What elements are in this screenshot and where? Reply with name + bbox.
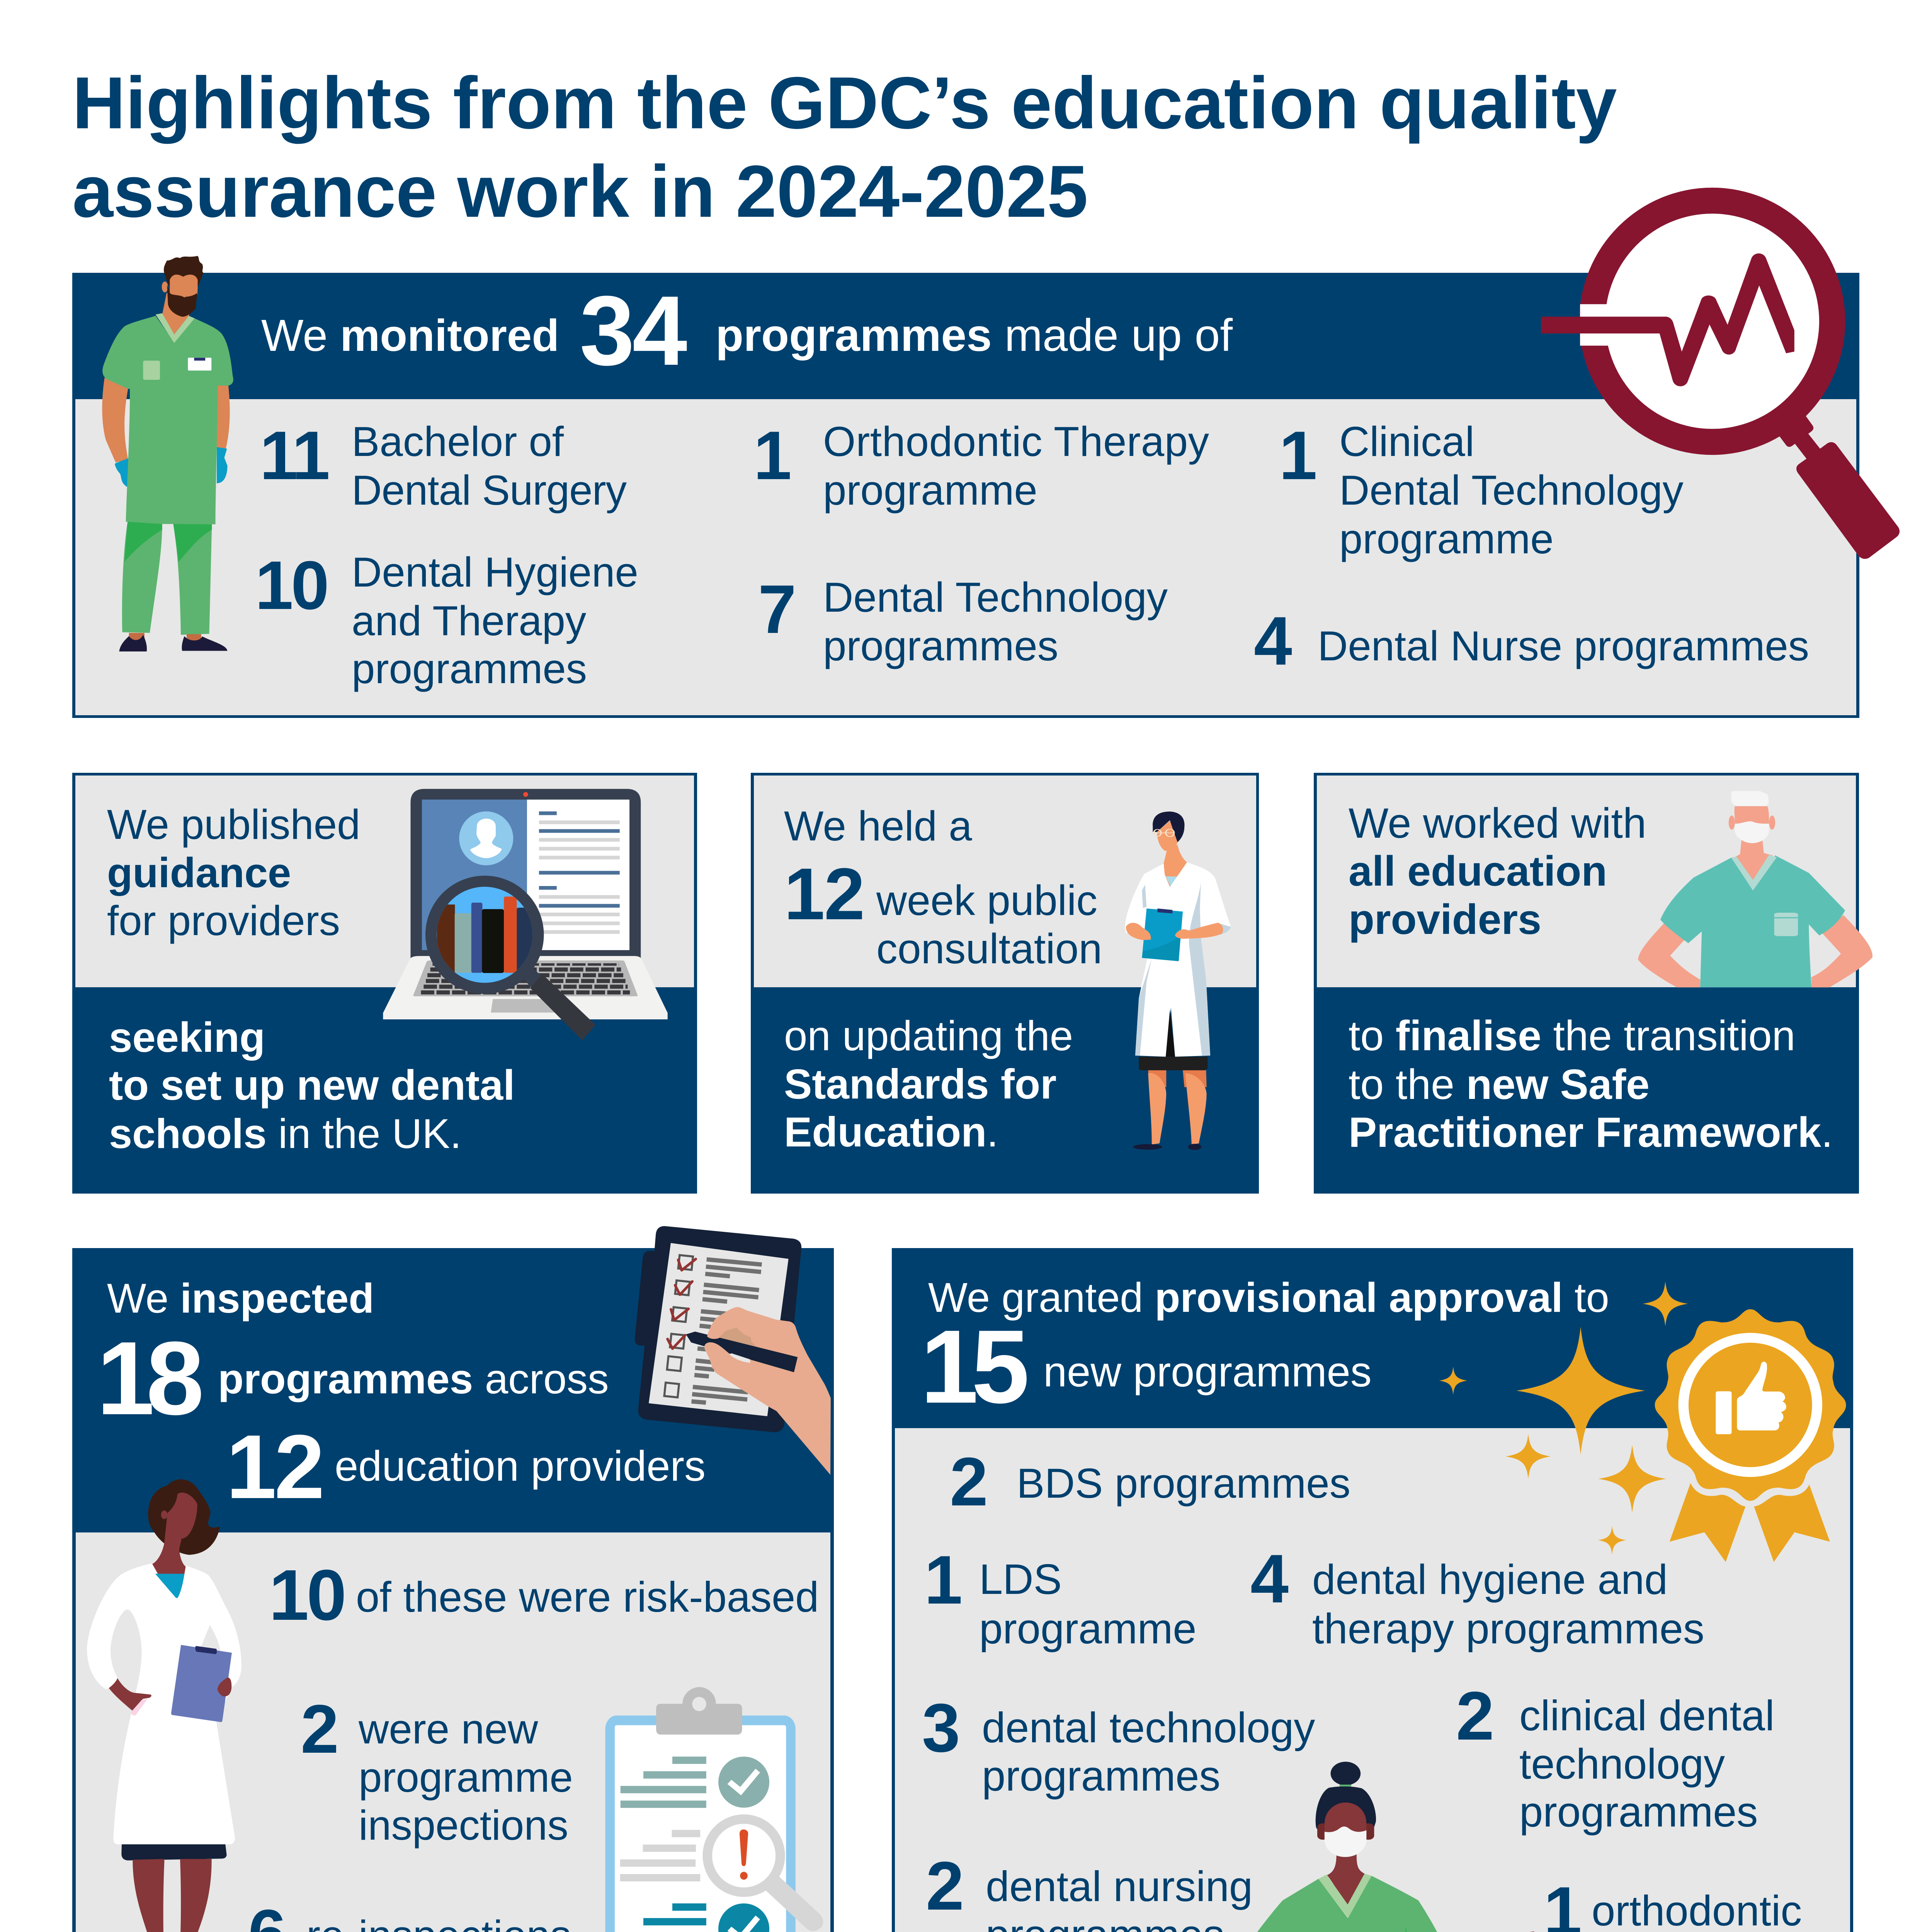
icon: checklist and hand with pen (635, 1226, 831, 1475)
stat: 2 clinical dental technology: programmes (1519, 1788, 1758, 1836)
stat: 2 new programme inspections: programme (359, 1754, 573, 1801)
text: we held a 12 week public consultation: We held a (784, 803, 972, 849)
stat: 1 LDS programme: programme (979, 1605, 1196, 1653)
heading: we monitored 34 programmes: programmes made up of (716, 310, 1233, 361)
stat: 7 Dental Technology: Dental Technology (823, 574, 1168, 621)
text: we worked with all education providers (1349, 800, 1646, 943)
stat: 11 Bachelor of Dental Surgery (260, 417, 627, 514)
stat: 10 Dental Hygiene and Therapy: programmes (352, 645, 587, 692)
heading: we inspected 18 programmes across 12 providers: 12 (226, 1416, 322, 1517)
text: we held a 12 week public consultation: week public (876, 877, 1097, 924)
icon: masked nurse in green scrubs (1214, 1762, 1535, 1932)
panel: programmes monitored (72, 273, 1859, 718)
text: we published guidance (107, 801, 360, 944)
heading: we monitored 34 programmes: We monitored (261, 310, 559, 361)
stat: 2 clinical dental technology: technology (1519, 1740, 1725, 1788)
stat: 10 Dental Hygiene and Therapy: Dental Hygiene (352, 549, 638, 595)
heading: we inspected 18 programmes across 12 providers (97, 1275, 706, 1517)
stat: 2 BDS programmes: BDS programmes (1017, 1460, 1350, 1507)
stat: 4 dental hygiene and therapy: dental hygiene and (1312, 1556, 1668, 1603)
panel: inspections (72, 1248, 834, 1932)
stat: 1 Orthodontic Therapy (753, 417, 1209, 514)
stat: 3 dental technology: 3 (922, 1689, 958, 1766)
stat: 7 Dental Technology: programmes (823, 622, 1058, 669)
icon: masked dentist in teal scrubs (1638, 791, 1872, 987)
stat: 4 Dental Nurse (1254, 602, 1809, 679)
text: finalise transition: to finalise the transition (1349, 1012, 1795, 1060)
stat: 10 Dental Hygiene and Therapy: and Therapy (352, 597, 587, 644)
panel: provisional approval (892, 1248, 1853, 1932)
stat: 4 Dental Nurse: 4 (1254, 602, 1292, 679)
stat: 1 Orthodontic Therapy: programme (823, 467, 1037, 514)
stat: 4 dental hygiene and therapy: 4 (1250, 1540, 1289, 1617)
icon: clipboard with magnifier and ticks (605, 1687, 823, 1932)
text: finalise transition (1349, 1012, 1833, 1156)
stat: 4 dental hygiene and therapy (1250, 1540, 1704, 1653)
stat: 2 BDS programmes: 2 (950, 1443, 986, 1520)
text: seeking to set up new dental schools: schools in the UK. (109, 1110, 461, 1157)
text: seeking to set up new dental schools: to set up new dental (109, 1062, 515, 1109)
stat: 2 dental nursing: 2 (926, 1847, 962, 1924)
stat: 1 LDS programme: LDS (979, 1556, 1062, 1603)
text: we worked with all education providers: all education (1349, 848, 1607, 895)
title: Highlights from the GDC’s education quality (72, 62, 1617, 144)
heading: we inspected 18 programmes across 12 providers: programmes across (218, 1355, 609, 1403)
stat: 2 new programme inspections: were new (358, 1706, 538, 1752)
text: we held a 12 week public consultation (784, 803, 1102, 973)
stat: 4 dental hygiene and therapy: therapy programmes (1312, 1605, 1704, 1653)
stat: 11 Bachelor of Dental Surgery: Dental Surgery (352, 467, 627, 514)
heading: we granted provisional approval to 15 new programmes: We granted provisional approval to (928, 1274, 1609, 1321)
stat: 10 risk-based: 10 (269, 1555, 344, 1635)
text: on updating the Standards for Education: Education. (784, 1109, 998, 1155)
heading: we inspected 18 programmes across 12 providers: education providers (335, 1442, 706, 1490)
stat: 2 clinical dental technology: 2 (1456, 1677, 1492, 1754)
stat: 3 dental technology (922, 1689, 1315, 1800)
text: we held a 12 week public consultation: consultation (876, 925, 1102, 973)
text: we published guidance: for providers (107, 897, 340, 944)
heading: we monitored 34 programmes (261, 276, 1233, 386)
icon: gold sparkles (1439, 1281, 1688, 1554)
stat: 2 BDS programmes (950, 1443, 1350, 1520)
text: we worked with all education providers: We worked with (1349, 800, 1646, 847)
text: we published guidance: We published (107, 801, 360, 848)
stat: 10 Dental Hygiene and Therapy (255, 547, 638, 692)
icon: dentist in green scrubs (102, 256, 233, 651)
stat: 11 Bachelor of Dental Surgery: Bachelor of (352, 418, 564, 465)
text: on updating the Standards for Education (784, 1012, 1073, 1155)
stat: 3 dental technology: programmes (982, 1752, 1220, 1800)
stat: 2 new programme inspections: 2 (301, 1690, 337, 1767)
stat: 3 dental technology: dental technology (982, 1704, 1315, 1752)
stat: 1 orthodontic therapy (1544, 1872, 1802, 1932)
title: assurance work in 2024-2025 (72, 150, 1088, 233)
heading: we monitored 34 programmes: 34 (580, 276, 687, 386)
text: we held a 12 week public consultation: 12 (784, 853, 864, 935)
stat: 7 Dental Technology: 7 (758, 571, 794, 648)
heading: we granted provisional approval to 15 new programmes: new programmes (1043, 1348, 1372, 1396)
stat: 1 Orthodontic Therapy: 1 (753, 417, 790, 494)
stat: 2 clinical dental technology (1456, 1677, 1774, 1836)
stat: 1 Orthodontic Therapy: Orthodontic Therapy (823, 418, 1209, 465)
icon: doctor with dark skin and clipboard (87, 1480, 242, 1932)
text: we published guidance: guidance (107, 849, 291, 896)
icon: doctor in white coat with clipboard (1125, 811, 1231, 1150)
text: we worked with all education providers: providers (1349, 896, 1541, 943)
heading: we inspected 18 programmes across 12 providers: We inspected (107, 1275, 374, 1321)
stat: 1 Clinical Dental Technology (1279, 417, 1684, 562)
panel: safe practitioner framework (1314, 773, 1859, 1194)
stat: 2 dental nursing: dental nursing (986, 1863, 1253, 1910)
icon: laptop with magnifier and books (383, 789, 668, 1040)
stat: 1 Clinical Dental Technology: 1 (1279, 417, 1316, 494)
text: on updating the Standards for Education: Standards for (784, 1061, 1056, 1107)
title (72, 62, 1617, 233)
icon: burgundy magnifying glass with pulse (1541, 188, 1900, 559)
stat: 1 LDS programme (924, 1541, 1196, 1653)
heading: we granted provisional approval to 15 new programmes (920, 1274, 1609, 1425)
heading: we inspected 18 programmes across 12 providers: 18 (97, 1320, 202, 1437)
stat: 2 new programme inspections: inspections (359, 1802, 568, 1849)
stat: 1 Clinical Dental Technology: programme (1339, 515, 1554, 562)
stat: 2 dental nursing (926, 1847, 1253, 1932)
text: seeking to set up new dental schools (109, 1014, 515, 1157)
stat: 6 re-inspections (248, 1895, 571, 1932)
text: finalise transition: Practitioner Framework. (1349, 1109, 1833, 1156)
stat: 10 risk-based (269, 1555, 819, 1635)
stat: 11 Bachelor of Dental Surgery: 11 (260, 417, 328, 494)
stat: 7 Dental Technology (758, 571, 1168, 669)
stat: 10 Dental Hygiene and Therapy: 10 (255, 547, 327, 624)
heading: we granted provisional approval to 15 new programmes: 15 (920, 1309, 1027, 1425)
stat: 2 new programme inspections (301, 1690, 573, 1849)
text: finalise transition: to the new Safe (1349, 1061, 1650, 1108)
stat: 10 risk-based: of these were risk-based (356, 1573, 819, 1621)
icon: gold rosette with thumbs up (1655, 1309, 1846, 1562)
panel: public consultation (751, 773, 1259, 1194)
stat: 2 clinical dental technology: clinical dental (1519, 1692, 1774, 1740)
text: seeking to set up new dental schools: seeking (109, 1014, 265, 1061)
panel: guidance for providers (72, 773, 697, 1194)
stat: 1 Clinical Dental Technology: Clinical (1339, 418, 1475, 465)
stat: 1 LDS programme: 1 (924, 1541, 961, 1618)
stat: 4 Dental Nurse: Dental Nurse programmes (1318, 622, 1809, 669)
stat: 1 Clinical Dental Technology: Dental Technology (1339, 467, 1684, 514)
text: on updating the Standards for Education: on updating the (784, 1012, 1073, 1059)
